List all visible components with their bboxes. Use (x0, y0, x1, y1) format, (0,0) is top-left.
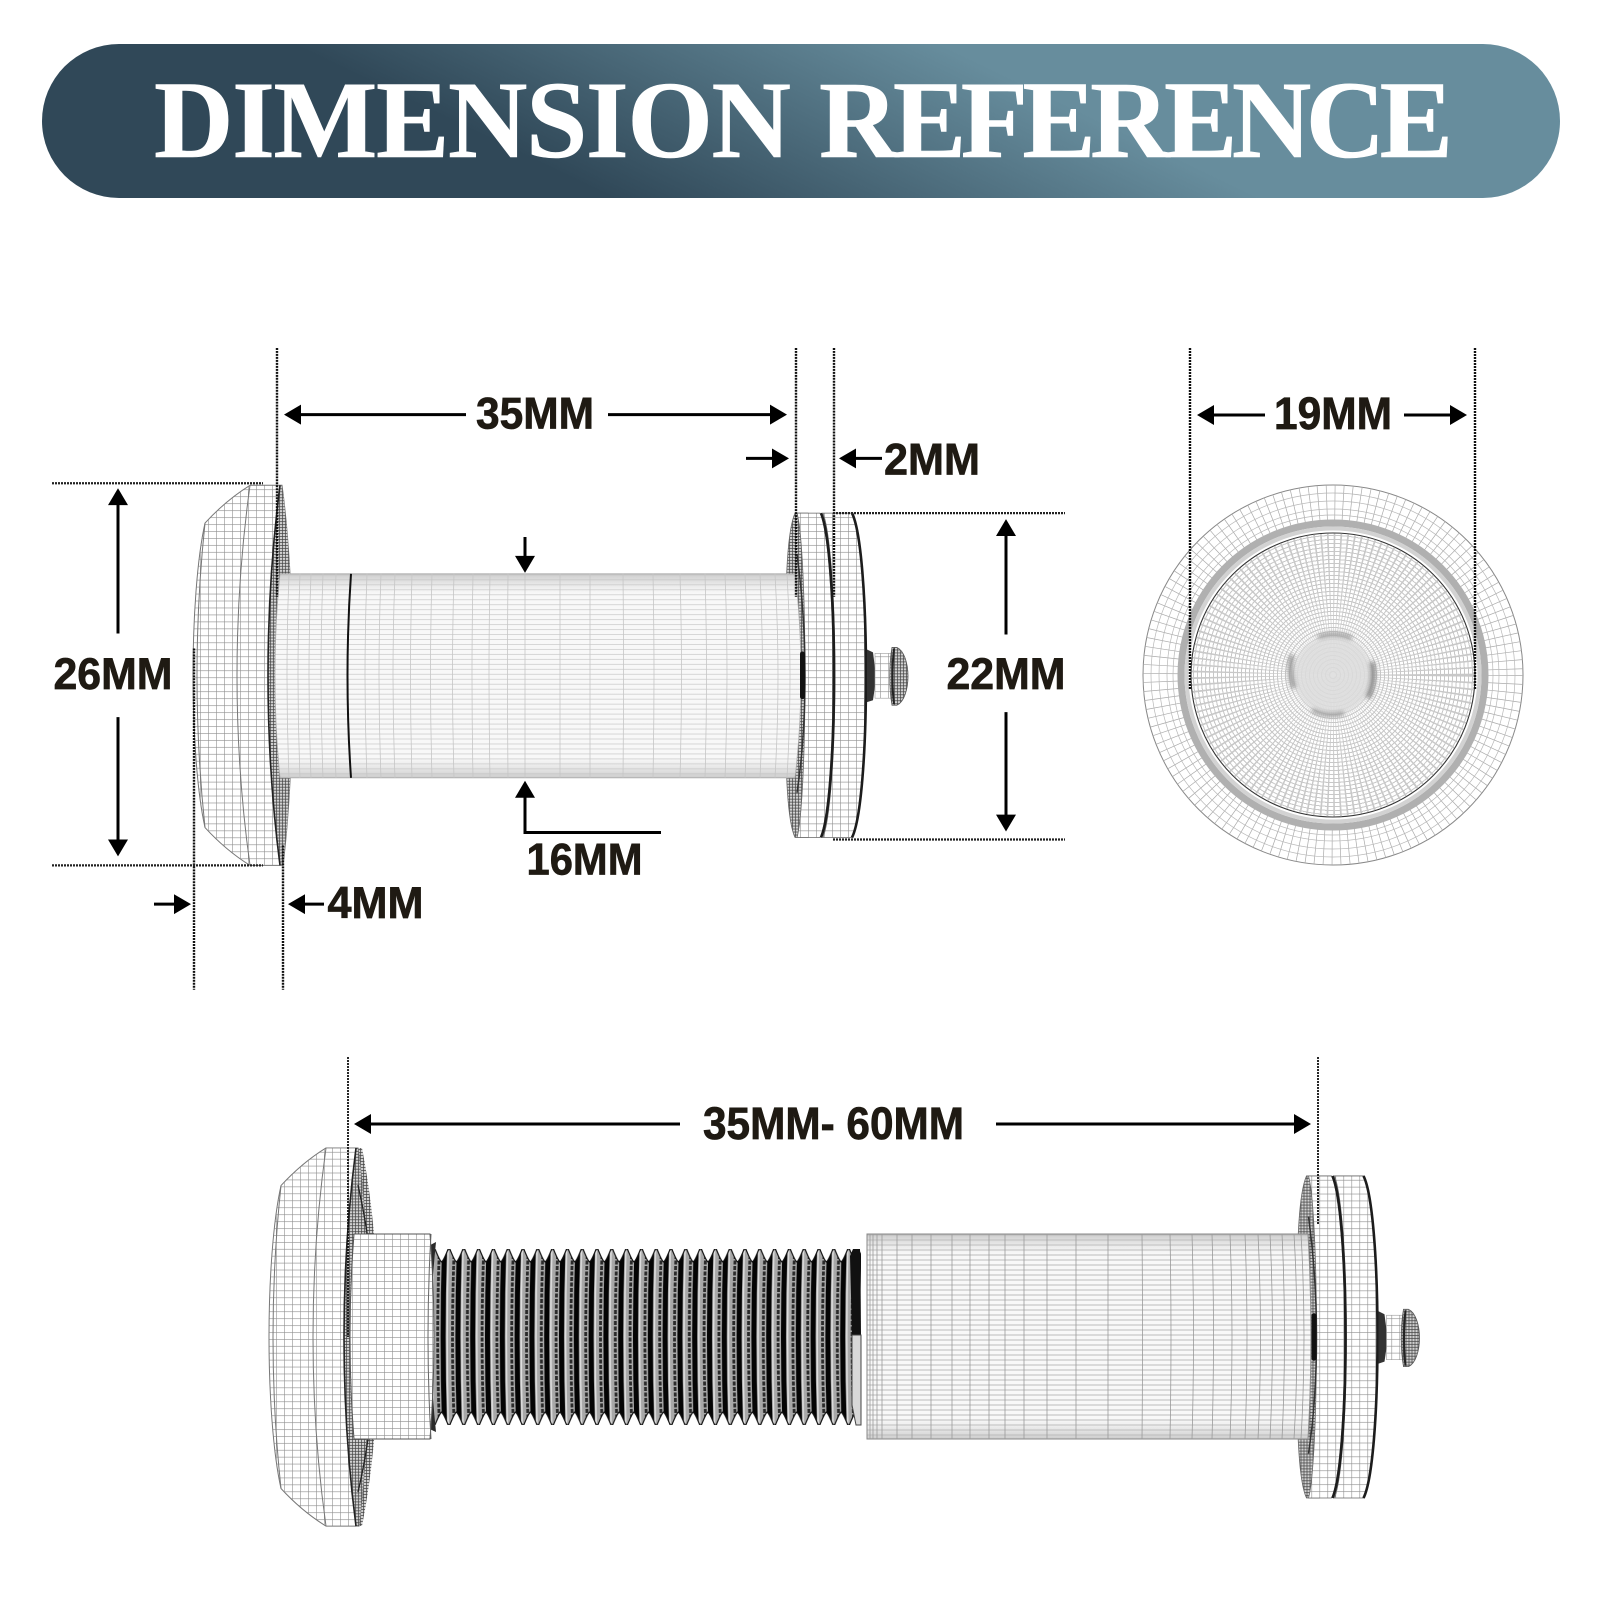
dimension: 35MM length (284, 388, 787, 439)
dimension: 35MM-60MM adjustable length: 35MM- 60MM (703, 1098, 964, 1149)
icon: flange rear extension (346, 1148, 379, 1526)
dimension: 4MM flange depth (154, 877, 423, 928)
dimension: 19MM lens width: 19MM (1274, 388, 1392, 439)
extension lines (52, 348, 1065, 990)
dimension: 22MM ring diameter: 22MM (946, 648, 1065, 699)
icon: rear rings and knob (797, 513, 908, 838)
panel: extended viewer with threaded barrel (269, 1057, 1420, 1526)
dimension: 2MM ring thickness: 2MM (884, 433, 980, 484)
icon: rear rings and knob (1308, 1176, 1420, 1498)
dimension: 4MM flange depth: 4MM (327, 877, 423, 928)
icon: rear seat arc (358, 1185, 375, 1492)
icon: viewer flange (193, 485, 293, 865)
panel: front view of lens (1143, 348, 1523, 865)
dimension: 2MM ring thickness (746, 433, 980, 484)
heading: REFERENCE (819, 59, 1453, 181)
dimension: 26MM flange diameter: 26MM (54, 648, 172, 699)
icon: viewer flange (269, 1148, 369, 1526)
icon: threaded shaft (416, 1242, 861, 1432)
dimension: 22MM ring diameter (946, 519, 1066, 832)
icon: front collar (350, 1234, 434, 1439)
icon: viewer barrel (275, 574, 801, 778)
icon: rear barrel (867, 1234, 1311, 1439)
dimension: 35MM-60MM adjustable length (354, 1098, 1311, 1149)
icon: rear ring backing (1296, 1176, 1320, 1498)
dimension: 19MM lens width (1197, 388, 1467, 439)
extension lines (1190, 348, 1475, 690)
dimension: 16MM barrel diameter: 16MM (526, 833, 643, 884)
icon: rear ring backing (785, 513, 808, 838)
heading: DIMENSION (154, 59, 791, 181)
extension lines (348, 1057, 1318, 1337)
icon: front circle mesh (1143, 485, 1523, 865)
title banner (42, 44, 1560, 198)
dimension: 35MM length: 35MM (476, 388, 594, 439)
panel: side view of assembled viewer (52, 348, 1066, 990)
banner pill (42, 44, 1560, 198)
dimension: 26MM flange diameter (54, 488, 172, 856)
dimension: 16MM barrel diameter (515, 537, 661, 884)
